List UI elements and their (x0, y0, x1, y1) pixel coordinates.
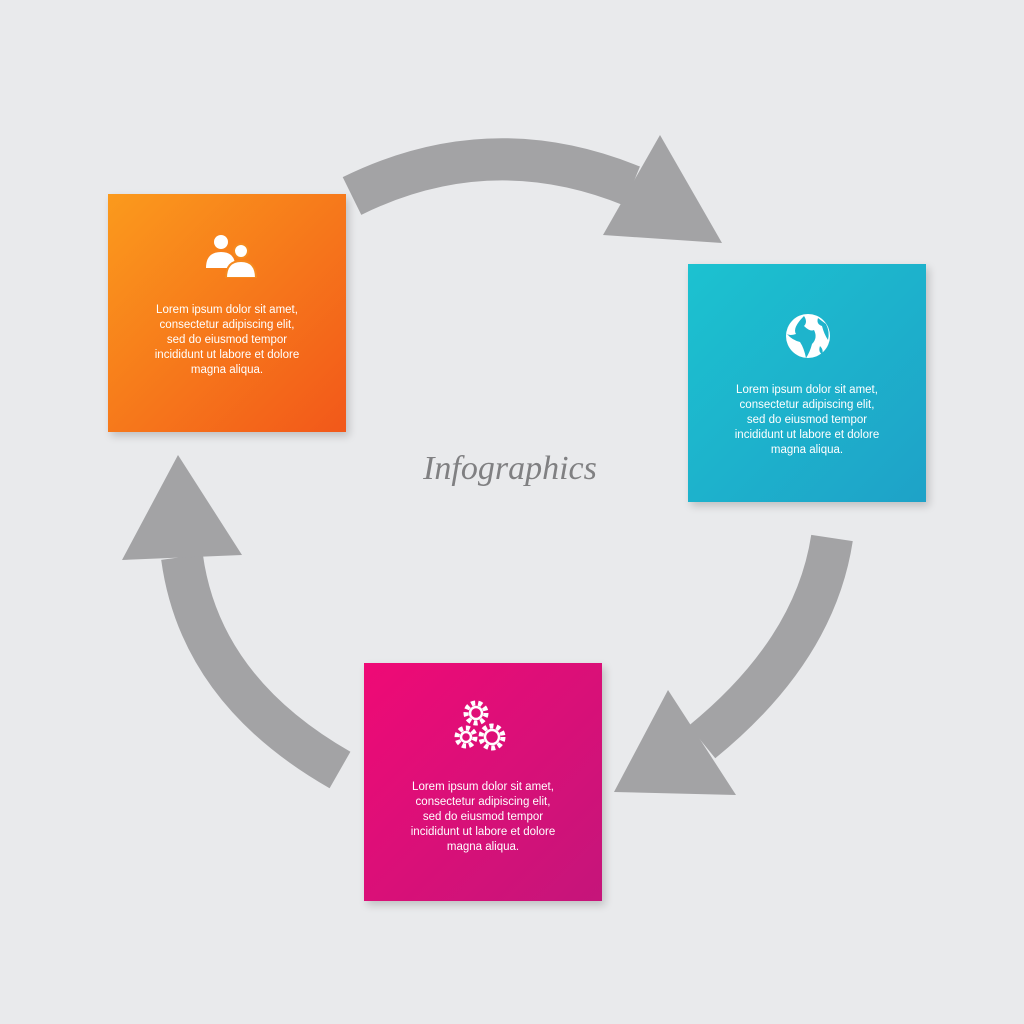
icon: gears (454, 700, 506, 750)
icon: globe (786, 314, 830, 358)
text block: consectetur adipiscing elit, (416, 796, 550, 808)
text block: incididunt ut labore et dolore (155, 349, 299, 361)
text block (155, 304, 299, 376)
text block: incididunt ut labore et dolore (411, 826, 555, 838)
panel: teal (688, 264, 926, 502)
panel: orange (108, 194, 346, 432)
text block: incididunt ut labore et dolore (735, 429, 879, 441)
text block: magna aliqua. (191, 364, 263, 376)
title: Infographics (423, 450, 597, 487)
text block: Lorem ipsum dolor sit amet, (412, 781, 554, 793)
arrow: left (122, 455, 340, 770)
text block (735, 384, 879, 456)
text block: sed do eiusmod tempor (167, 334, 287, 346)
text block: consectetur adipiscing elit, (160, 319, 294, 331)
text block: Lorem ipsum dolor sit amet, (736, 384, 878, 396)
text block (411, 781, 555, 853)
arrow: right (614, 538, 832, 795)
arrow: top (352, 135, 722, 243)
text block: Lorem ipsum dolor sit amet, (156, 304, 298, 316)
icon: people (206, 235, 257, 278)
text block: sed do eiusmod tempor (423, 811, 543, 823)
text block: sed do eiusmod tempor (747, 414, 867, 426)
panel: magenta (364, 663, 602, 901)
text block: magna aliqua. (447, 841, 519, 853)
text block: consectetur adipiscing elit, (740, 399, 874, 411)
text block: magna aliqua. (771, 444, 843, 456)
